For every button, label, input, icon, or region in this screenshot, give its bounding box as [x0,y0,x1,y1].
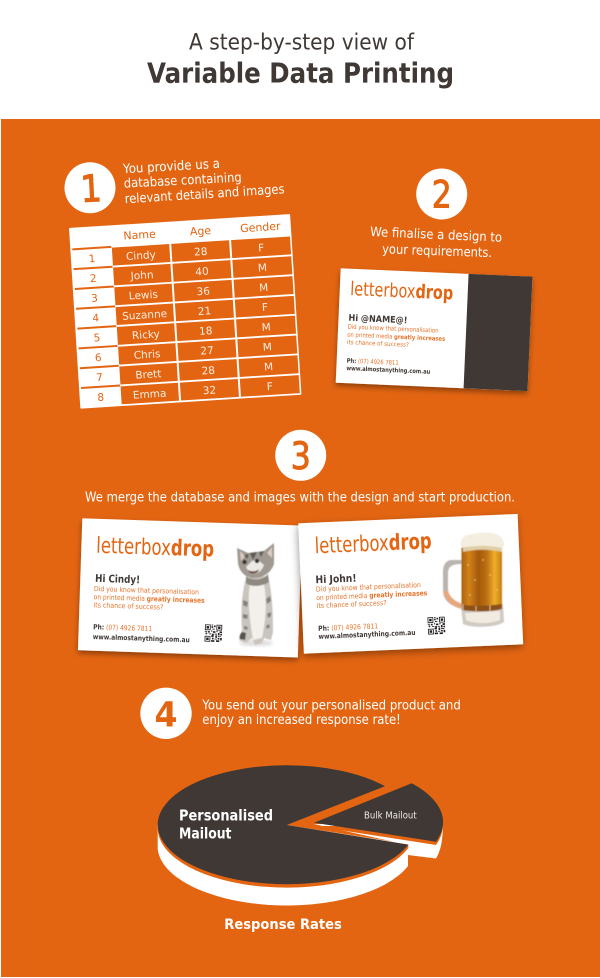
step 4 text: You send out your personalised product and [201,698,461,713]
Cindy logo: letterboxdrop [96,534,215,563]
John contact: www.almostanything.com.au [318,629,416,641]
Cindy greeting: Hi Cindy! [95,573,140,586]
card contact details [346,358,431,376]
step 4 badge [140,688,192,739]
QR code [204,624,222,642]
table values: 28 [194,246,208,259]
row index lines [72,246,120,389]
label: personalised mailout: Mailout [179,825,232,843]
table values [118,242,275,402]
table values: 32 [202,384,217,397]
dark card panel [464,274,533,391]
table values: Brett [135,368,162,382]
table values: F [266,381,273,393]
icon: kitten [237,543,274,646]
card message [347,324,446,350]
table header: Name [123,228,156,243]
card: John [298,514,523,654]
Cindy contact: www.almostanything.com.au [93,633,190,644]
row numbers: 3 [91,293,98,305]
database table [69,214,301,409]
step 1 text: relevant details and images [124,182,285,207]
QR code [427,617,445,635]
chart caption: Response Rates [224,917,342,933]
step 3 text: We merge the database and images with the design and start production. [85,491,515,506]
card greeting: Hi @NAME@! [348,314,408,326]
title: A step-by-step view of [189,30,415,56]
table values: 40 [195,266,209,278]
card message: Did you know that personalisation [347,324,439,335]
John message: on printed media greatly increases [316,589,427,602]
step 1 badge: 1 [79,167,103,211]
slice side wall [314,824,443,858]
table header [123,220,281,243]
table values: 21 [197,305,212,318]
card contact details: www.almostanything.com.au [346,365,430,376]
table values: Ricky [132,328,160,342]
Cindy message: its chance of success? [93,601,164,612]
table values: Emma [133,388,167,402]
table values: M [262,341,272,354]
table values: 27 [200,345,214,358]
John logo: letterboxdrop [314,529,432,559]
step 4 text [201,698,461,728]
bulk mailout slice [314,783,443,842]
row numbers: 8 [97,392,104,404]
step 2 text: your requirements. [382,242,492,261]
Cindy contact [93,623,190,644]
table values: Suzanne [122,308,167,323]
Cindy message: Did you know that personalisation [94,585,199,597]
title [147,30,454,90]
table data cells [112,236,300,404]
slice rim [314,826,443,845]
table values: Chris [133,348,161,362]
step 1 badge [64,162,116,213]
step 2 badge: 2 [432,173,452,216]
table values: John [129,269,154,283]
design template card [336,268,533,391]
icon: beer mug [443,532,504,627]
step 2 badge [416,168,467,220]
personalised mailout slice [158,765,408,884]
table header: Gender [240,220,281,235]
row numbers [88,253,105,404]
row numbers: 6 [95,352,102,364]
table header: Age [189,224,212,238]
table values: 36 [196,285,211,298]
table values: M [259,282,269,294]
step 4 badge: 4 [154,696,178,736]
table values: M [261,321,271,334]
John greeting: Hi John! [315,573,357,586]
main pie rim [158,825,408,888]
card message: its chance of success? [347,339,409,349]
table values: 28 [201,365,215,378]
table values: M [264,361,274,374]
table values: Lewis [128,289,158,303]
step 1 text: You provide us a [122,157,220,177]
card: Cindy [78,518,302,658]
step 1 text [122,157,285,207]
row numbers: 2 [90,273,97,285]
table values: F [262,302,268,314]
title: Variable Data Printing [147,56,454,90]
Cindy contact: Ph: (07) 4926 7811 [93,623,152,633]
step 3 badge [275,430,326,481]
step 1 text: database containing [123,171,242,192]
John contact [318,621,416,641]
table values: 18 [199,325,213,338]
step 2 text: We finalise a design to [370,225,502,246]
row numbers: 7 [96,372,103,384]
label: bulk mailout: Bulk Mailout [364,811,417,822]
Cindy message [93,585,205,613]
card contact details: Ph: (07) 4926 7811 [347,358,399,367]
John message: its chance of success? [316,599,387,610]
main pie side wall [158,825,408,905]
table values: F [258,242,265,255]
row numbers: 5 [93,332,101,345]
John contact: Ph: (07) 4926 7811 [318,622,378,633]
step 2 text [370,225,502,261]
row numbers: 4 [92,312,100,325]
John message [316,581,428,610]
label: personalised mailout: Personalised [179,807,273,825]
card logo: letterboxdrop [350,278,454,305]
row numbers: 1 [88,253,96,265]
step 4 text: enjoy an increased response rate! [202,713,401,728]
Cindy message: on printed media greatly increases [94,593,205,605]
pie chart [158,765,443,905]
table values: M [258,262,267,275]
table values: Cindy [126,249,156,263]
step 3 badge: 3 [291,435,311,478]
card message: on printed media greatly increases [347,332,446,343]
label: personalised mailout [179,807,273,843]
John message: Did you know that personalisation [316,581,421,594]
